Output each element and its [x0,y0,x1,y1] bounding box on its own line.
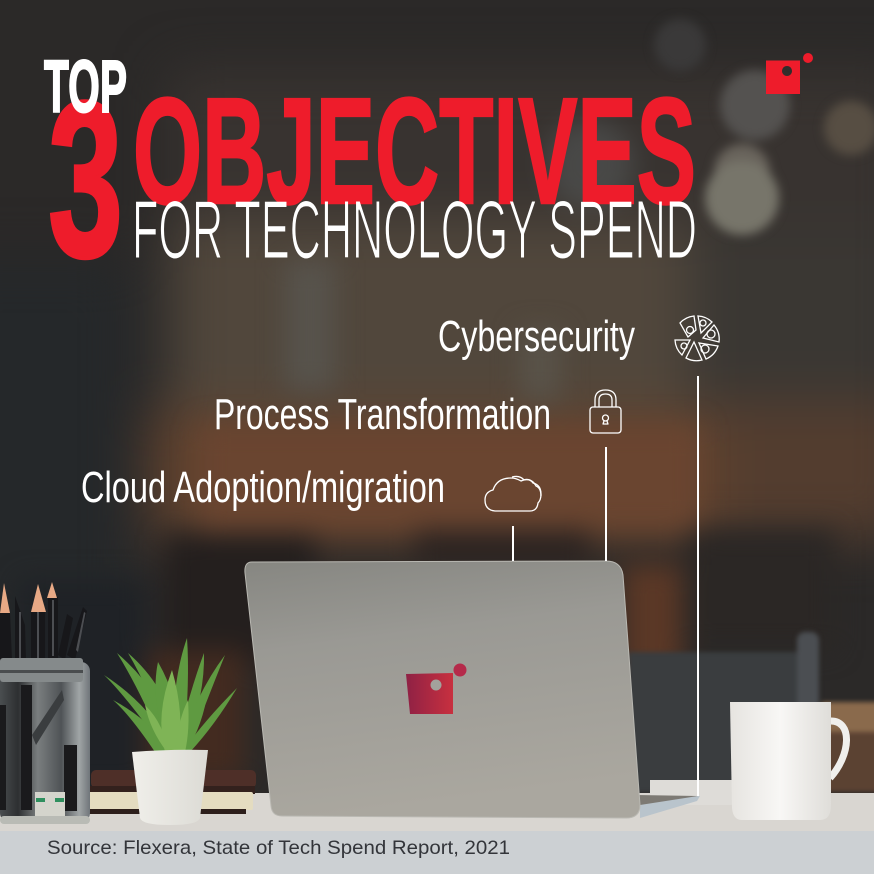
bokeh lights [654,19,874,235]
label: process transformation: Process Transformation [214,390,551,439]
icon: padlock [590,390,621,433]
connector: cybersecurity [697,376,699,796]
connector: cloud adoption [512,526,514,561]
laptop [245,561,700,818]
icon: cloud [485,476,541,511]
plant [104,638,237,825]
pencil jar [0,582,90,824]
word: TOP: TOP [44,45,127,128]
main title [44,45,697,304]
connector: process transformation [605,447,607,561]
plant pot [132,750,208,825]
big number three: 3 [48,56,123,304]
chair behind laptop [628,632,874,792]
laptop logo [406,664,466,714]
label: cybersecurity: Cybersecurity [438,312,635,361]
source note: Source: Flexera, State of Tech Spend Report, 2021 [47,837,510,859]
desk surface [0,780,874,832]
coffee mug [730,702,847,820]
icon: circuit globe [675,316,719,361]
label: cloud adoption: Cloud Adoption/migration [81,463,445,512]
brand logo [766,53,813,94]
source strip [0,831,874,874]
notebook [88,770,256,814]
